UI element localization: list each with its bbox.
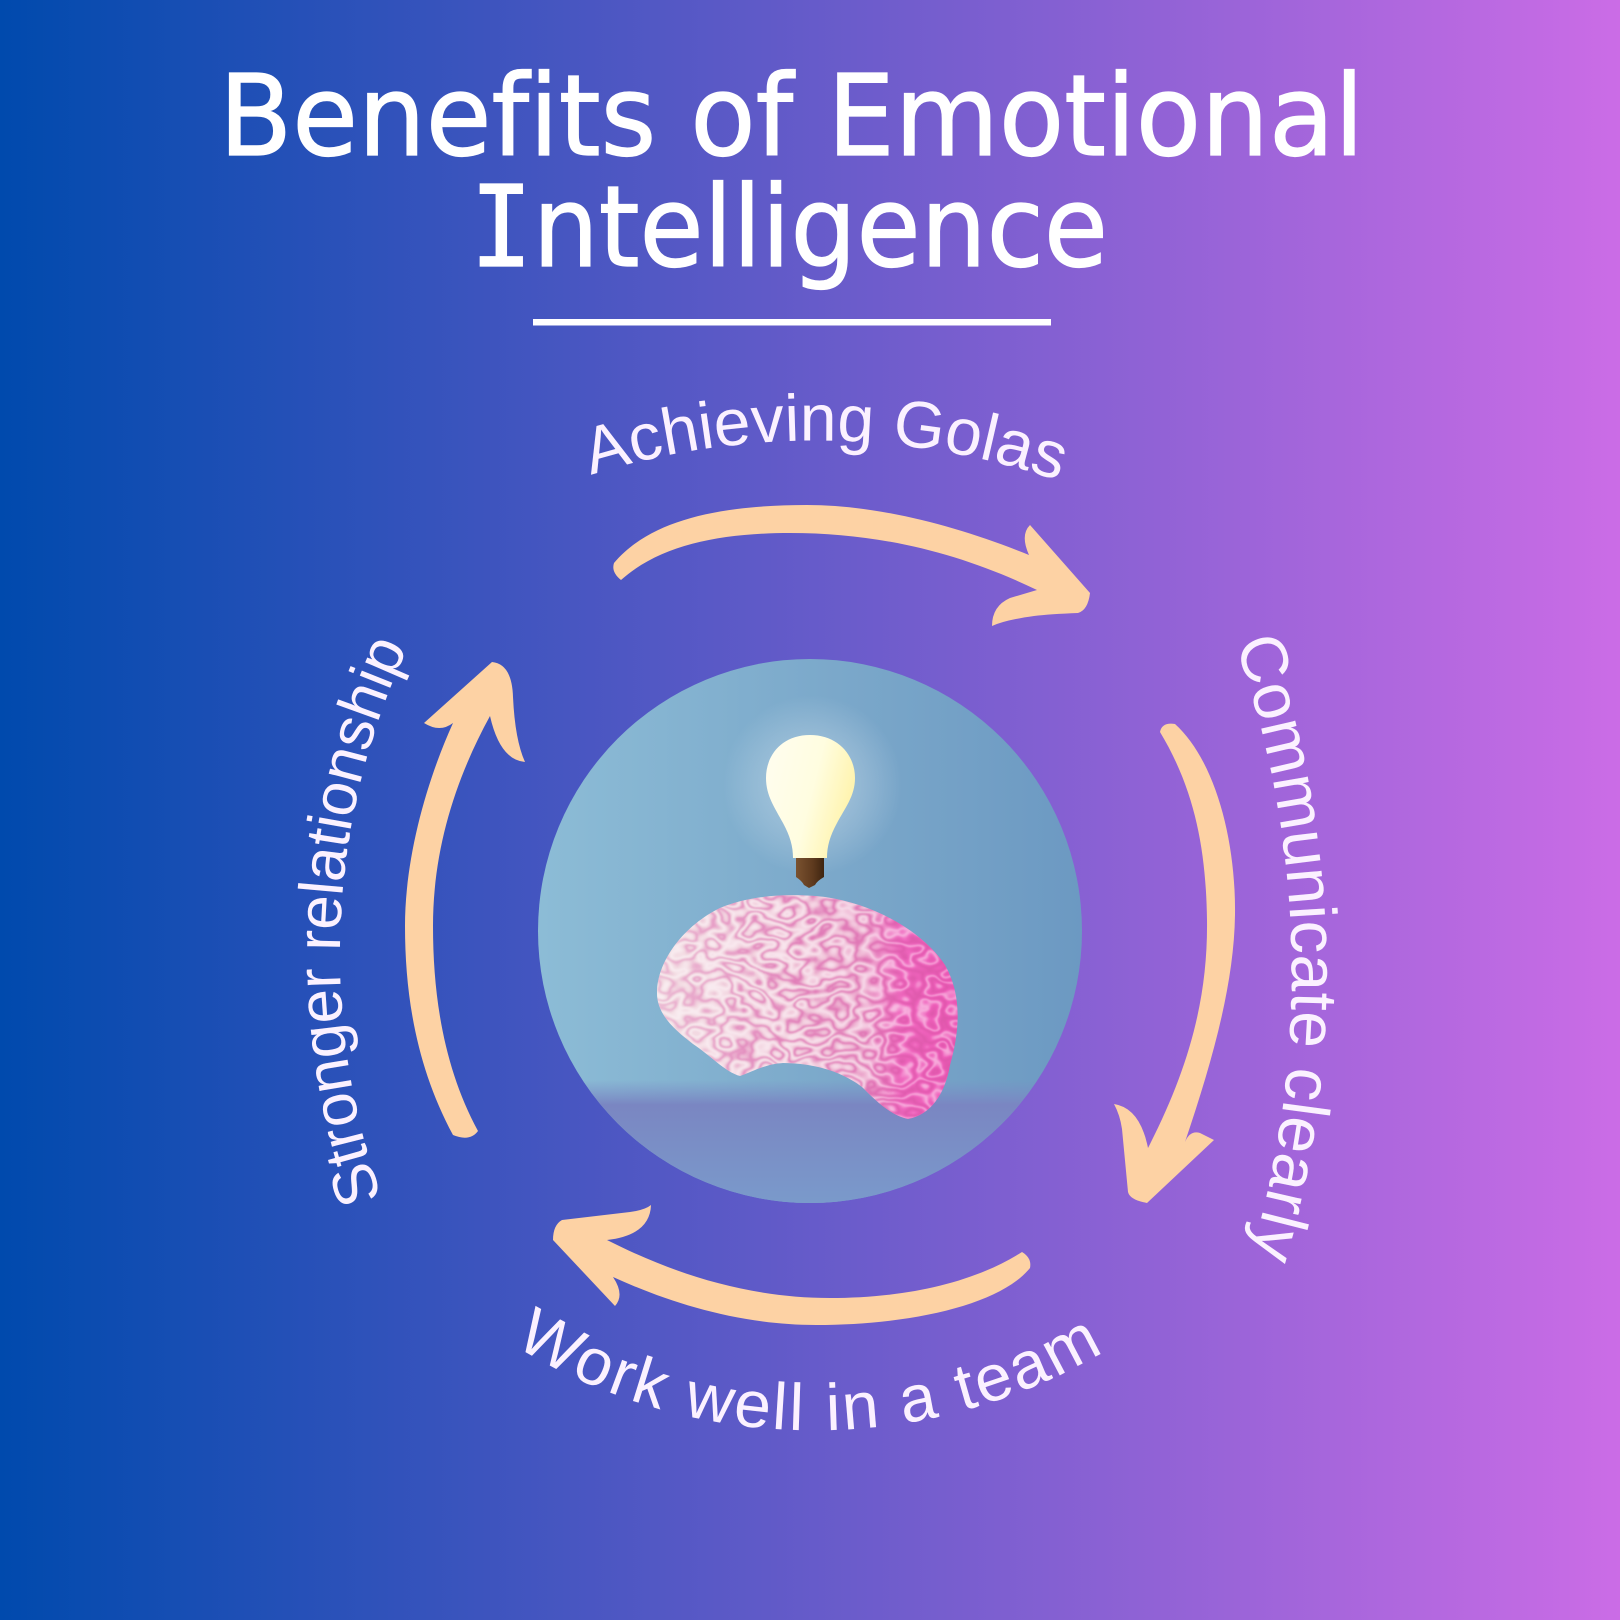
- label: Achieving Golas: Achieving Golas: [591, 393, 1064, 478]
- image backdrop disc: [538, 659, 1082, 1204]
- central image: brain and light bulb: [538, 659, 1082, 1204]
- arrow: top, pointing right: [613, 505, 1090, 626]
- title underline: [533, 319, 1051, 326]
- label: Communicate clearly: Communicate clearly: [1241, 637, 1338, 1264]
- icon: light bulb: [766, 735, 855, 888]
- arrow: left, pointing up: [405, 662, 525, 1138]
- icon: brain: [650, 890, 965, 1122]
- title: Benefits of Emotional: [219, 52, 1364, 182]
- title: [219, 52, 1364, 293]
- title: Intelligence: [470, 163, 1108, 293]
- arrow: bottom, pointing left: [553, 1205, 1030, 1325]
- label: Stronger relationship: Stronger relationship: [298, 640, 410, 1204]
- label: Work well in a team: Work well in a team: [526, 1306, 1100, 1430]
- arrow: right, pointing down: [1114, 724, 1235, 1203]
